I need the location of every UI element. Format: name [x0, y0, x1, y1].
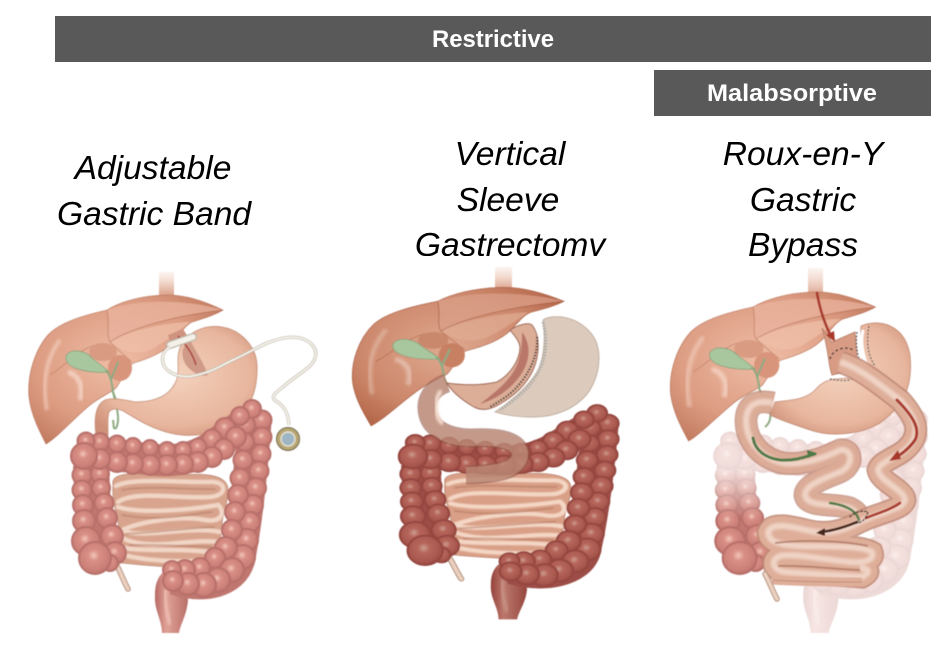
- header bar: Malabsorptive: Malabsorptive: [707, 80, 877, 107]
- stomach remnant and pouch: [770, 323, 911, 434]
- title: Adjustable Gastric Band: [57, 150, 252, 233]
- faded colon background: [714, 400, 927, 633]
- title: Roux-en-Y Gastric Bypass: Bypass: [748, 227, 858, 264]
- biliopancreatic limb: [746, 402, 860, 520]
- header bar: Malabsorptive: [654, 70, 931, 116]
- illustration: Roux-en-Y gastric bypass anatomy: [670, 268, 927, 633]
- title: Roux-en-Y Gastric Bypass: [723, 136, 886, 264]
- header bar: Restrictive: Restrictive: [432, 26, 554, 53]
- illustration: vertical sleeve gastrectomy anatomy: [352, 267, 619, 619]
- band tube and access port: [162, 337, 316, 450]
- removed stomach portion: [495, 317, 599, 417]
- title: Vertical Sleeve Gastrectomy: Vertical: [455, 136, 567, 173]
- title: Adjustable Gastric Band: Adjustable: [73, 150, 231, 187]
- title: Vertical Sleeve Gastrectomy: Gastrectomy: [415, 227, 607, 264]
- sleeve stomach and duodenum: [427, 324, 538, 475]
- flow arrows: [753, 293, 917, 536]
- header bar: Restrictive: [55, 16, 931, 62]
- title: Vertical Sleeve Gastrectomy: [416, 141, 607, 256]
- title: Roux-en-Y Gastric Bypass: Gastric: [750, 182, 856, 219]
- stomach with band: [95, 326, 257, 435]
- title: Roux-en-Y Gastric Bypass: Roux-en-Y: [723, 136, 886, 173]
- title: Adjustable Gastric Band: Gastric Band: [57, 196, 252, 233]
- roux limb and common channel: [768, 362, 916, 582]
- title: Vertical Sleeve Gastrectomy: Sleeve: [457, 182, 559, 219]
- illustration: adjustable gastric band anatomy: [29, 272, 316, 633]
